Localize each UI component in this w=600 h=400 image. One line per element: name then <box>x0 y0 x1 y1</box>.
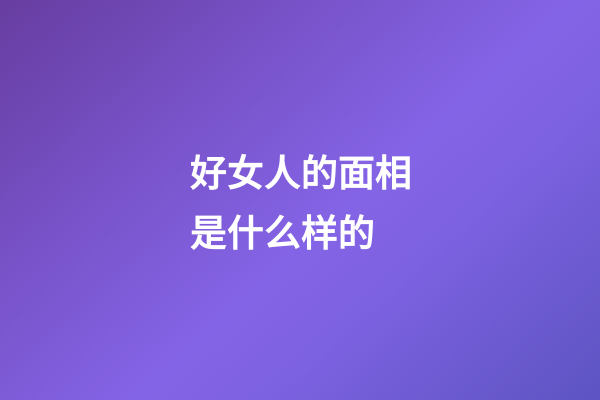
title: 是什么样的 <box>190 213 375 254</box>
title: 好女人的面相 <box>190 153 412 194</box>
title <box>190 153 412 254</box>
